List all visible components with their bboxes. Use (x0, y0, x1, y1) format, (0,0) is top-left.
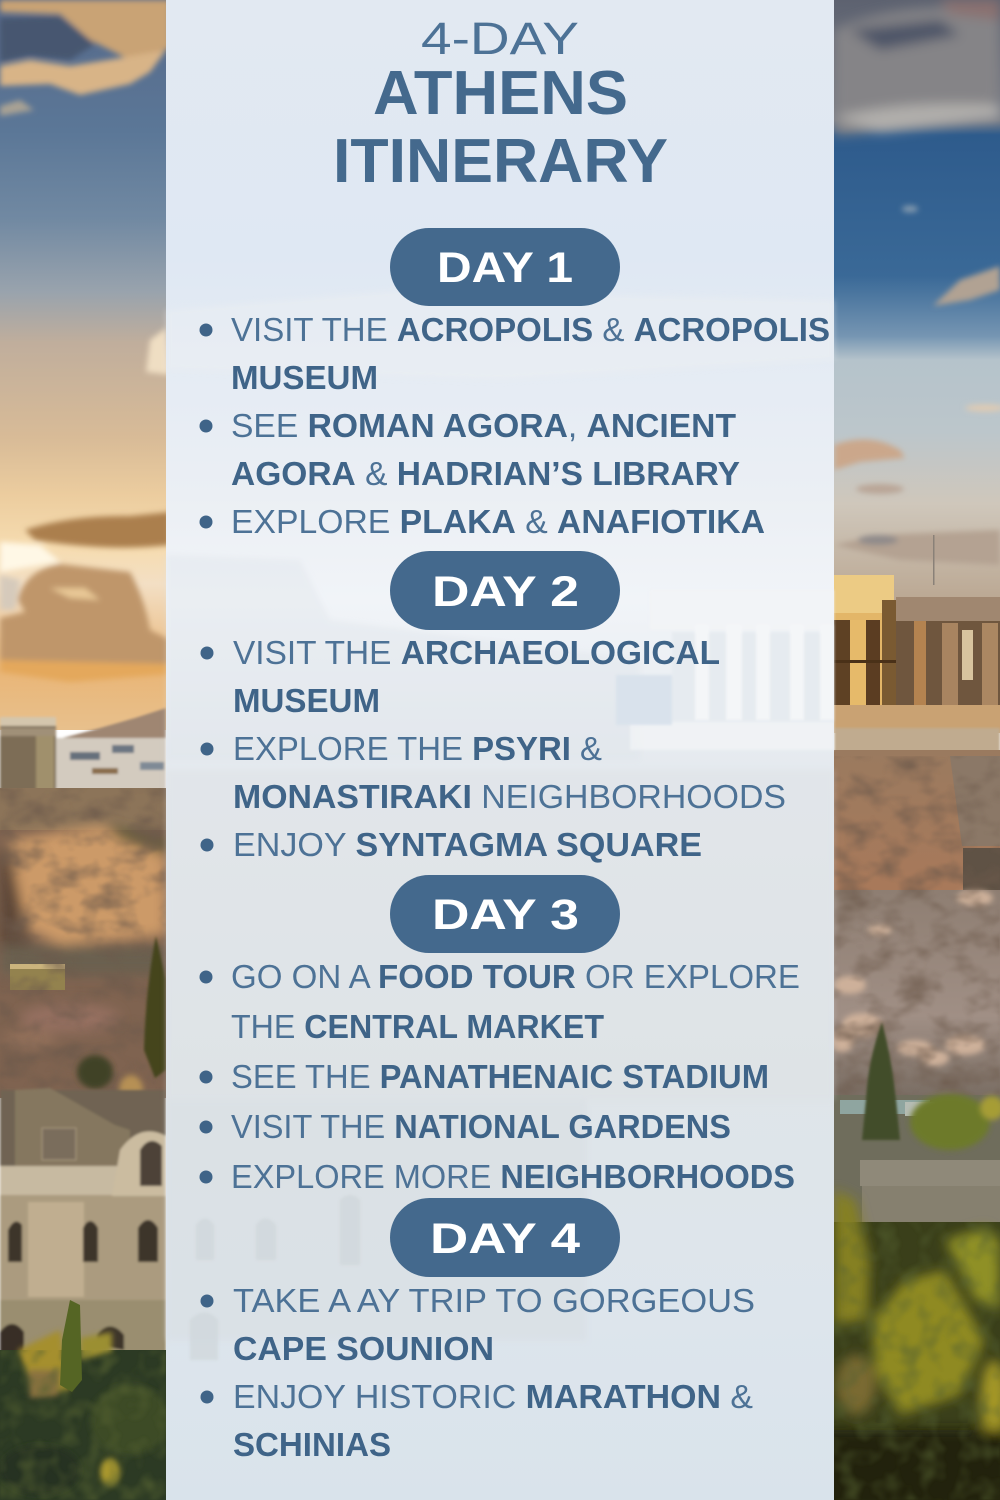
day 1 bullet list: AGORA & HADRIAN’S LIBRARY (231, 455, 740, 492)
title line: ATHENS: ATHENS (373, 59, 628, 128)
day 3 bullet list (200, 958, 800, 1195)
right lower trees and paths (820, 1022, 1000, 1500)
sky (0, 0, 1000, 730)
translucent text panel (166, 0, 834, 1500)
pill: day 2 (390, 551, 620, 630)
day 1 bullet list (200, 311, 830, 540)
section: day 4 (200, 1198, 755, 1463)
title (333, 13, 668, 196)
day 2 bullet list: EXPLORE THE PSYRI & (233, 730, 602, 767)
day 4 bullet list: CAPE SOUNION (233, 1330, 494, 1367)
day 1 bullet list: MUSEUM (231, 359, 378, 396)
day 3 bullet list: SEE THE PANATHENAIC STADIUM (231, 1058, 769, 1095)
day 1 bullet list: EXPLORE PLAKA & ANAFIOTIKA (231, 503, 765, 540)
day 2 bullet list (200, 634, 786, 863)
day 4 bullet list (200, 1282, 755, 1463)
pill: day 1: DAY 1 (437, 244, 573, 292)
day 4 bullet list: TAKE A AY TRIP TO GORGEOUS (233, 1282, 755, 1319)
left lower trees (0, 1300, 170, 1500)
Parthenon (834, 575, 1000, 754)
day 3 bullet list: GO ON A FOOD TOUR OR EXPLORE (231, 958, 800, 995)
title line: 4-DAY: 4-DAY (421, 13, 579, 64)
day 4 bullet list: ENJOY HISTORIC MARATHON & (233, 1378, 753, 1415)
pill: day 4 (390, 1198, 620, 1277)
left theatre ruins (0, 1088, 166, 1365)
right wall and rock (830, 750, 1000, 1100)
pill: day 4: DAY 4 (430, 1215, 580, 1263)
day 4 bullet list: SCHINIAS (233, 1426, 391, 1463)
day 3 bullet list: EXPLORE MORE NEIGHBORHOODS (231, 1158, 795, 1195)
day 2 bullet list: VISIT THE ARCHAEOLOGICAL (233, 634, 720, 671)
section: day 1 (200, 228, 830, 540)
title line: ITINERARY: ITINERARY (333, 127, 668, 196)
pill: day 3 (390, 875, 620, 953)
day 3 bullet list: THE CENTRAL MARKET (231, 1008, 604, 1045)
day 3 bullet list: VISIT THE NATIONAL GARDENS (231, 1108, 731, 1145)
day 2 bullet list: MONASTIRAKI NEIGHBORHOODS (233, 778, 786, 815)
left hillside city (0, 708, 166, 800)
pill: day 1 (390, 228, 620, 306)
day 1 bullet list: VISIT THE ACROPOLIS & ACROPOLIS (231, 311, 830, 348)
day 2 bullet list: MUSEUM (233, 682, 380, 719)
pill: day 3: DAY 3 (432, 891, 579, 939)
section: day 3 (200, 875, 800, 1195)
pill: day 2: DAY 2 (432, 568, 579, 616)
day 2 bullet list: ENJOY SYNTAGMA SQUARE (233, 826, 702, 863)
faint photo showing through panel (166, 290, 834, 1360)
left rock (0, 788, 166, 1105)
section: day 2 (200, 551, 786, 863)
day 1 bullet list: SEE ROMAN AGORA, ANCIENT (231, 407, 736, 444)
